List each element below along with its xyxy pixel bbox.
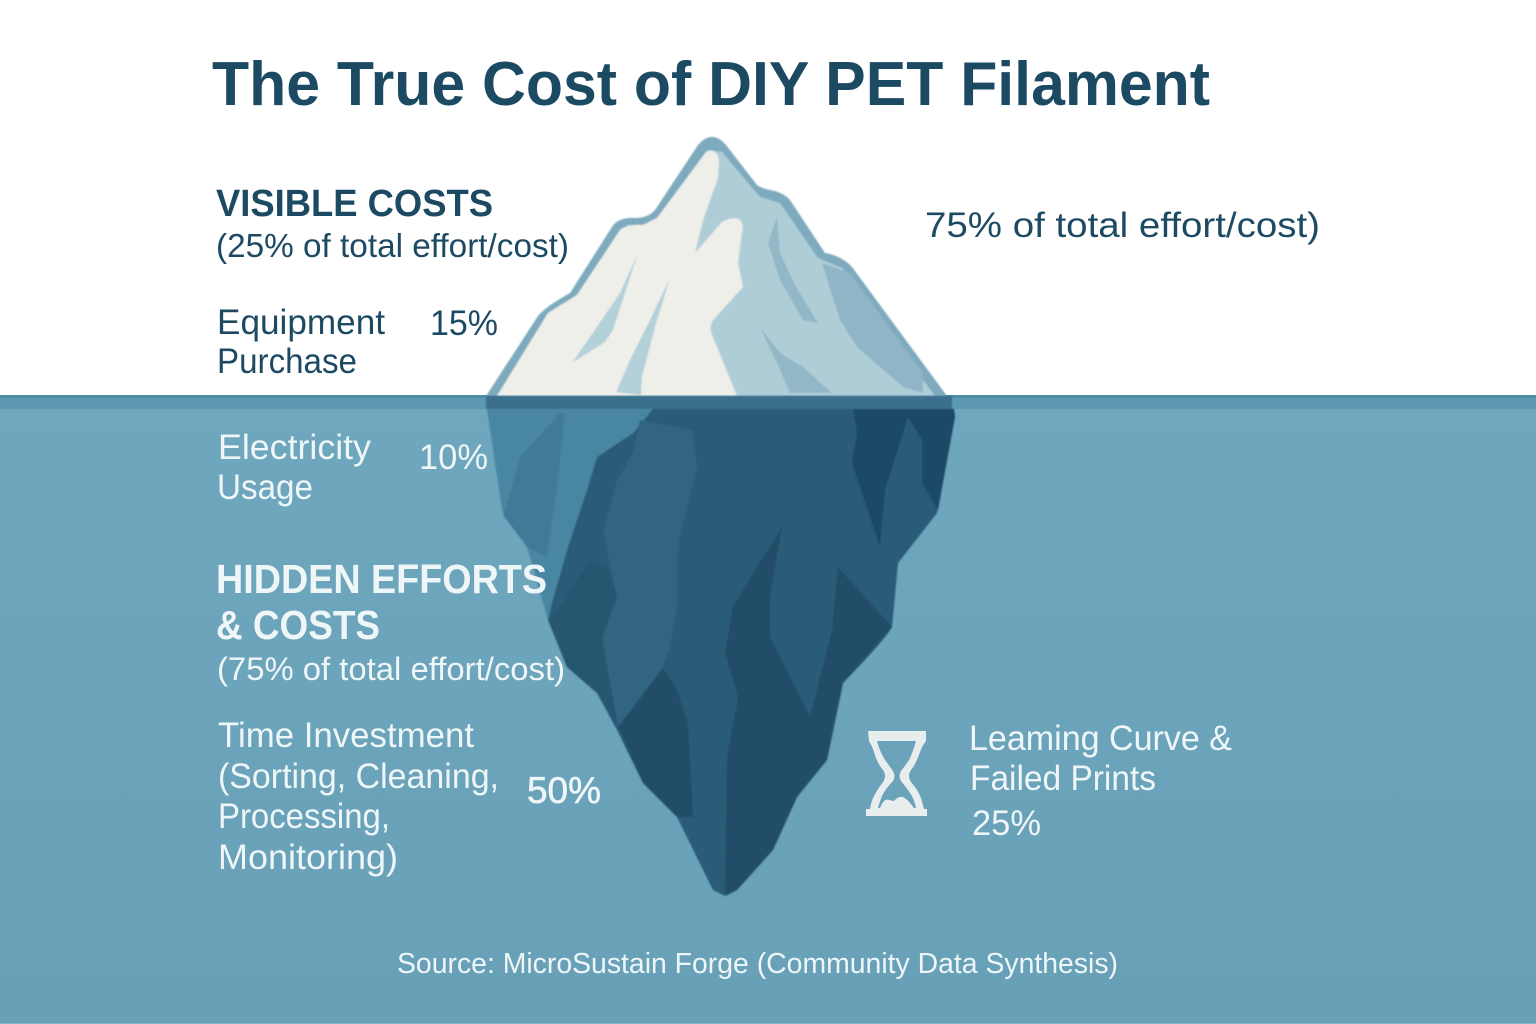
heading: hidden efforts and costs	[216, 556, 565, 687]
value: electricity 10%: 10%	[419, 438, 488, 477]
label: time investment: Monitoring)	[218, 838, 398, 877]
label: equipment purchase: Equipment	[217, 303, 385, 342]
title: The True Cost of DIY PET Filament	[212, 50, 1210, 119]
iceberg below water	[485, 396, 955, 896]
heading: hidden efforts and costs: & COSTS	[216, 602, 380, 648]
label: learning curve and failed prints: Leaming Curve &	[969, 719, 1232, 758]
icon: hourglass	[866, 731, 927, 816]
iceberg above water	[486, 137, 947, 396]
label: equipment purchase: Purchase	[217, 342, 357, 381]
label: time investment	[218, 716, 499, 877]
value: equipment 15%: 15%	[430, 304, 498, 343]
heading: visible costs	[216, 183, 569, 264]
label: learning curve and failed prints	[969, 719, 1232, 843]
label: time investment: (Sorting, Cleaning,	[218, 757, 499, 796]
heading: visible costs: (25% of total effort/cost)	[216, 227, 569, 264]
heading: visible costs: VISIBLE COSTS	[216, 183, 493, 225]
callout: right side 75%: 75% of total effort/cost)	[925, 206, 1320, 245]
source note: Source: MicroSustain Forge (Community Data Synthesis)	[397, 948, 1118, 980]
sky background	[0, 0, 1536, 396]
label: learning curve and failed prints: Failed Prints	[970, 759, 1156, 798]
value: time investment 50%: 50%	[527, 770, 601, 811]
water background	[0, 395, 1536, 1024]
label: electricity usage	[217, 428, 372, 507]
heading: hidden efforts and costs: (75% of total effort/cost)	[217, 651, 565, 687]
label: learning curve and failed prints: 25%	[972, 804, 1041, 843]
label: electricity usage: Usage	[217, 468, 313, 507]
label: electricity usage: Electricity	[218, 428, 372, 467]
label: time investment: Time Investment	[218, 716, 474, 755]
label: time investment: Processing,	[218, 797, 390, 836]
label: equipment purchase	[217, 303, 385, 381]
heading: hidden efforts and costs: HIDDEN EFFORTS	[216, 556, 547, 602]
